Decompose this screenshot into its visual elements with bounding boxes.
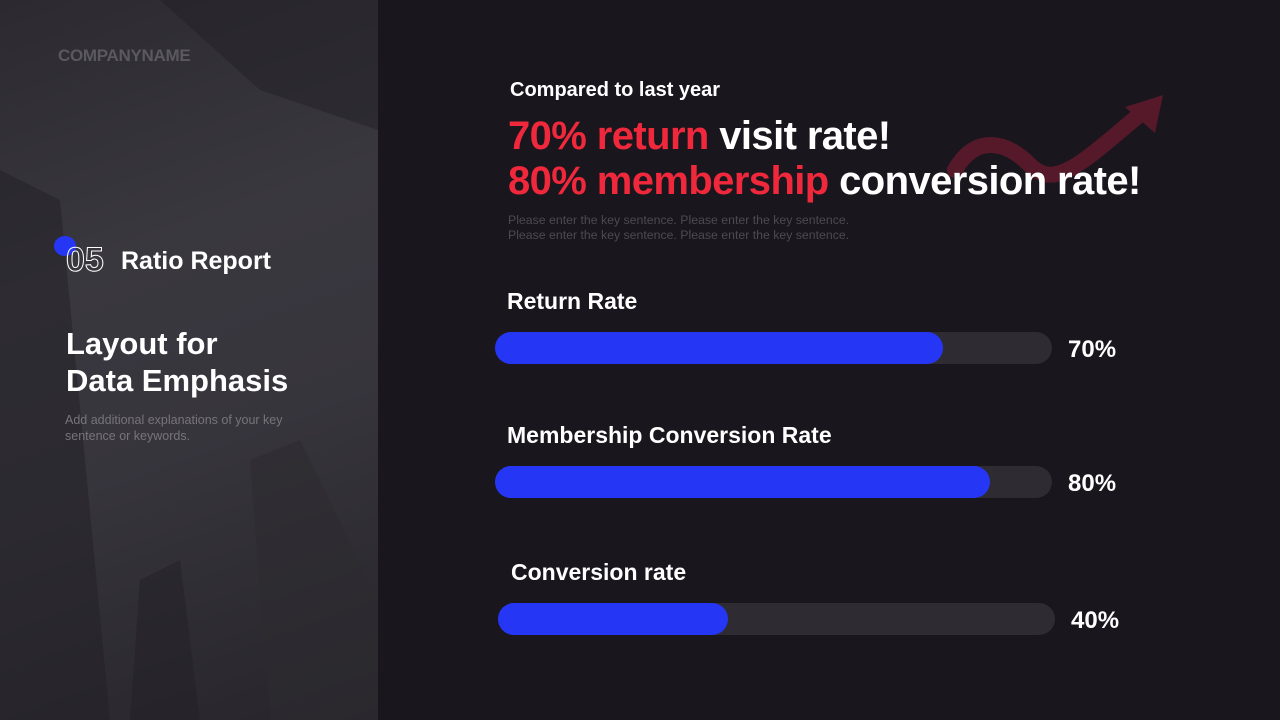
bar chart: membership conversion: 80% (1068, 470, 1116, 497)
heading: Ratio Report: Ratio Report (121, 247, 271, 275)
headline: 70% return visit rate! (508, 114, 891, 158)
panel: left photo background (0, 0, 378, 720)
section number and title (54, 236, 271, 275)
heading: Layout for Data Emphasis: Layout for (66, 326, 218, 361)
text: key sentence: Please enter the key sentence. Please enter the key sentence. (508, 213, 849, 227)
text: explanation (65, 413, 283, 443)
heading: Layout for Data Emphasis (66, 326, 288, 398)
bar chart: membership conversion: Membership Conversion Rate (507, 422, 832, 448)
bar chart: membership conversion (495, 422, 1116, 498)
text: key sentence (508, 213, 849, 242)
bar chart: return rate: 70% (1068, 336, 1116, 363)
bar chart: conversion rate: Conversion rate (511, 559, 686, 585)
text: explanation: Add additional explanations of your key (65, 413, 283, 427)
bar chart: conversion rate (498, 559, 1119, 635)
headline: 80% membership conversion rate! (508, 159, 1141, 203)
text: explanation: sentence or keywords. (65, 429, 190, 443)
bar chart: conversion rate: 40% (1071, 607, 1119, 634)
bar chart: return rate: Return Rate (507, 288, 637, 314)
text: key sentence: Please enter the key sentence. Please enter the key sentence. (508, 228, 849, 242)
text: compared to last year: Compared to last year (510, 79, 720, 101)
headline (508, 114, 1141, 203)
bar chart: return rate (495, 288, 1116, 364)
heading: Layout for Data Emphasis: Data Emphasis (66, 363, 288, 398)
logo: company name: COMPANYNAME (58, 46, 190, 65)
icon: blue dot (54, 236, 76, 256)
icon: wavy arrow (947, 95, 1163, 183)
